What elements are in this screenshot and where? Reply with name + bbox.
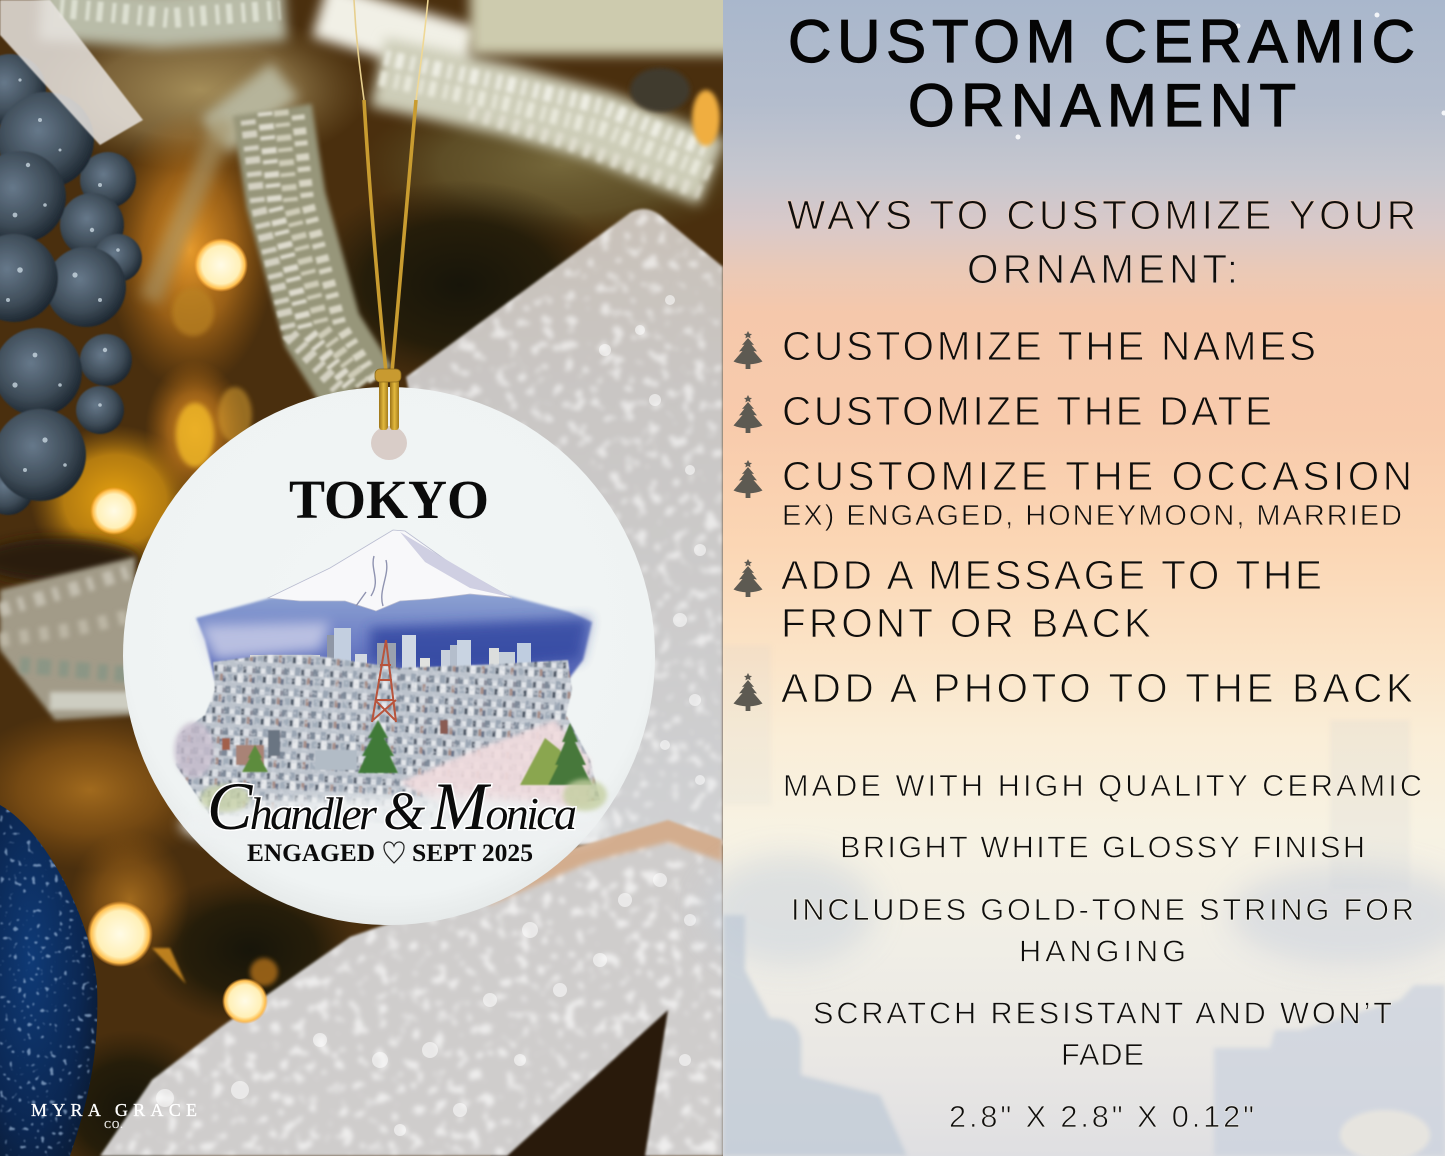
brand watermark: MYRA GRACE: [31, 1100, 197, 1120]
item: occasion: [734, 453, 1412, 532]
lavender wash: [174, 722, 214, 778]
ornament disc: [123, 387, 655, 925]
silver ribbon lower: [100, 812, 723, 1156]
product features: HANGING: [1019, 934, 1186, 968]
ceramic ornament: [123, 0, 655, 925]
product features: MADE WITH HIGH QUALITY CERAMIC: [783, 768, 1422, 803]
silver ribbon upper: [400, 200, 723, 850]
gold string: [354, 0, 428, 430]
brand watermark: CO.: [104, 1120, 124, 1131]
ornament title: TOKYO: [289, 469, 489, 530]
city blocks: [170, 655, 605, 830]
hanging hole: [371, 426, 407, 460]
item: message: [734, 552, 1322, 646]
subheading: WAYS TO CUSTOMIZE YOUR: [787, 192, 1416, 238]
bokeh sparkles: [156, 295, 706, 1136]
bauble glitter: [6, 78, 120, 472]
bokeh lights: [87, 68, 720, 1024]
watercolor illustration: Mt Fuji and Tokyo: [170, 530, 610, 855]
background stars: [1016, 12, 1445, 140]
heart icon: [384, 842, 404, 863]
pine branches: [0, 0, 740, 720]
item: occasion: CUSTOMIZE THE OCCASION: [782, 453, 1412, 499]
heading: CUSTOM CERAMIC: [788, 8, 1415, 75]
item: message: FRONT OR BACK: [781, 600, 1151, 646]
photo background: holiday tree scene: [0, 0, 760, 1156]
occasion line: ENGAGED: [247, 838, 375, 867]
navy bauble: [0, 800, 105, 1156]
green mist right: [563, 779, 607, 811]
pine trees: [242, 720, 592, 785]
product features: SCRATCH RESISTANT AND WON’T: [813, 996, 1392, 1030]
sheer ribbon: [0, 0, 143, 145]
blue watercolor haze: [196, 590, 592, 690]
item: occasion: EX) ENGAGED, HONEYMOON, MARRIED: [782, 500, 1402, 532]
product features: INCLUDES GOLD-TONE STRING FOR: [791, 892, 1414, 927]
product features: 2.8" X 2.8" X 0.12": [949, 1099, 1254, 1134]
product features: BRIGHT WHITE GLOSSY FINISH: [840, 830, 1365, 864]
panel background: [723, 0, 1445, 1156]
Tokyo tower: [372, 640, 396, 722]
foreground mist: [180, 795, 610, 855]
couple names: Chandler & Monica: [207, 768, 577, 844]
heading: ORNAMENT: [908, 72, 1296, 139]
faded skyline: [705, 645, 1445, 1156]
product features: [783, 768, 1422, 1134]
brand watermark: [31, 1100, 197, 1131]
product features: FADE: [1061, 1037, 1144, 1072]
skyline: [222, 628, 562, 680]
item: names: CUSTOMIZE THE NAMES: [782, 323, 1316, 369]
item: photo: ADD A PHOTO TO THE BACK: [781, 665, 1413, 711]
subheading: [787, 192, 1416, 292]
occasion date: SEPT 2025: [412, 838, 533, 867]
item: message: ADD A MESSAGE TO THE: [781, 552, 1322, 598]
customization list: [734, 323, 1413, 711]
panel: product details: [705, 0, 1445, 1156]
green mist: [200, 784, 250, 812]
item: date: CUSTOMIZE THE DATE: [782, 388, 1272, 434]
subheading: ORNAMENT:: [967, 246, 1238, 292]
heading: [788, 8, 1415, 139]
Mt Fuji snow cap: [268, 530, 512, 611]
bauble cluster: [0, 54, 142, 515]
blossoms: [400, 720, 590, 825]
